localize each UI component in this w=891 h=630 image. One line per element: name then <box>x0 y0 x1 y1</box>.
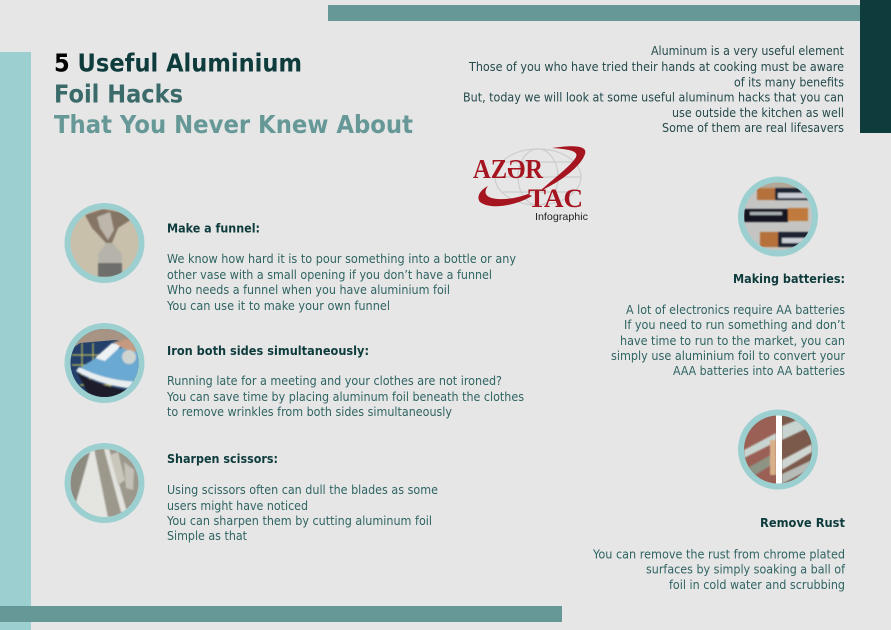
intro text: Aluminum is a very useful element <box>651 44 844 58</box>
title: Foil Hacks <box>54 80 183 108</box>
icon: batteries photo <box>738 176 818 256</box>
icon: rust photo <box>738 410 818 490</box>
bottom bar <box>0 606 562 622</box>
text: sharpen scissors: Simple as that <box>167 529 247 543</box>
text: sharpen scissors: You can sharpen them by cutting aluminum foil <box>166 514 432 528</box>
intro text: Those of you who have tried their hands at cooking must be aware <box>468 60 844 74</box>
text: sharpen scissors: Using scissors often can dull the blades as some <box>167 483 438 497</box>
text: make a funnel: You can use it to make your own funnel <box>166 299 390 313</box>
heading: sharpen scissors: Sharpen scissors: <box>167 451 278 466</box>
right dark bar <box>860 0 891 133</box>
text: remove rust <box>592 548 846 592</box>
left bar <box>0 52 31 630</box>
text: make a funnel: other vase with a small opening if you don’t have a funnel <box>167 268 492 282</box>
text: iron both sides: You can save time by placing aluminum foil beneath the clothes <box>166 390 524 404</box>
text: making batteries: AAA batteries into AA batteries <box>673 364 845 378</box>
heading: making batteries: Making batteries: <box>733 271 845 286</box>
logo: AZERTAC Infographic <box>473 146 588 223</box>
text: iron both sides: Running late for a meeting and your clothes are not ironed? <box>167 374 502 388</box>
text: remove rust: foil in cold water and scrubbing <box>669 578 845 592</box>
title <box>54 48 413 139</box>
intro text: use outside the kitchen as well <box>672 106 844 120</box>
title: 5 Useful Aluminium <box>54 48 302 78</box>
heading: iron both sides: Iron both sides simultaneously: <box>167 343 369 358</box>
intro text <box>463 44 844 135</box>
text: make a funnel: We know how hard it is to pour something into a bottle or any <box>167 252 516 266</box>
logo: AZERTAC Infographic: Infographic <box>535 211 588 223</box>
top bar <box>328 5 860 21</box>
logo: AZERTAC Infographic: TAC <box>528 184 583 213</box>
text: iron both sides: to remove wrinkles from both sides simultaneously <box>167 405 452 419</box>
text: make a funnel <box>166 252 516 313</box>
text: sharpen scissors: users might have noticed <box>167 499 308 513</box>
icon: scissors photo <box>64 443 144 523</box>
text: making batteries: If you need to run something and don’t <box>624 318 845 332</box>
text: making batteries: simply use aluminium foil to convert your <box>611 349 845 363</box>
text: make a funnel: Who needs a funnel when you have aluminium foil <box>167 283 450 297</box>
icon: iron photo <box>64 323 144 403</box>
heading: remove rust: Remove Rust <box>760 515 845 530</box>
text: iron both sides <box>166 374 524 419</box>
text: remove rust: You can remove the rust from chrome plated <box>592 548 845 562</box>
text: making batteries: have time to run to the market, you can <box>620 334 845 348</box>
intro text: of its many benefits <box>734 76 844 90</box>
title: That You Never Knew About <box>54 110 413 139</box>
intro text: But, today we will look at some useful aluminum hacks that you can <box>463 90 844 104</box>
text: making batteries <box>611 303 845 378</box>
text: sharpen scissors <box>166 483 438 543</box>
icon: funnel photo <box>64 203 144 283</box>
intro text: Some of them are real lifesavers <box>662 121 844 135</box>
heading: make a funnel: Make a funnel: <box>167 220 260 236</box>
text: making batteries: A lot of electronics require AA batteries <box>626 303 845 317</box>
text: remove rust: surfaces by simply soaking a ball of <box>646 562 846 576</box>
logo: AZERTAC Infographic: AZƏR <box>473 154 543 184</box>
